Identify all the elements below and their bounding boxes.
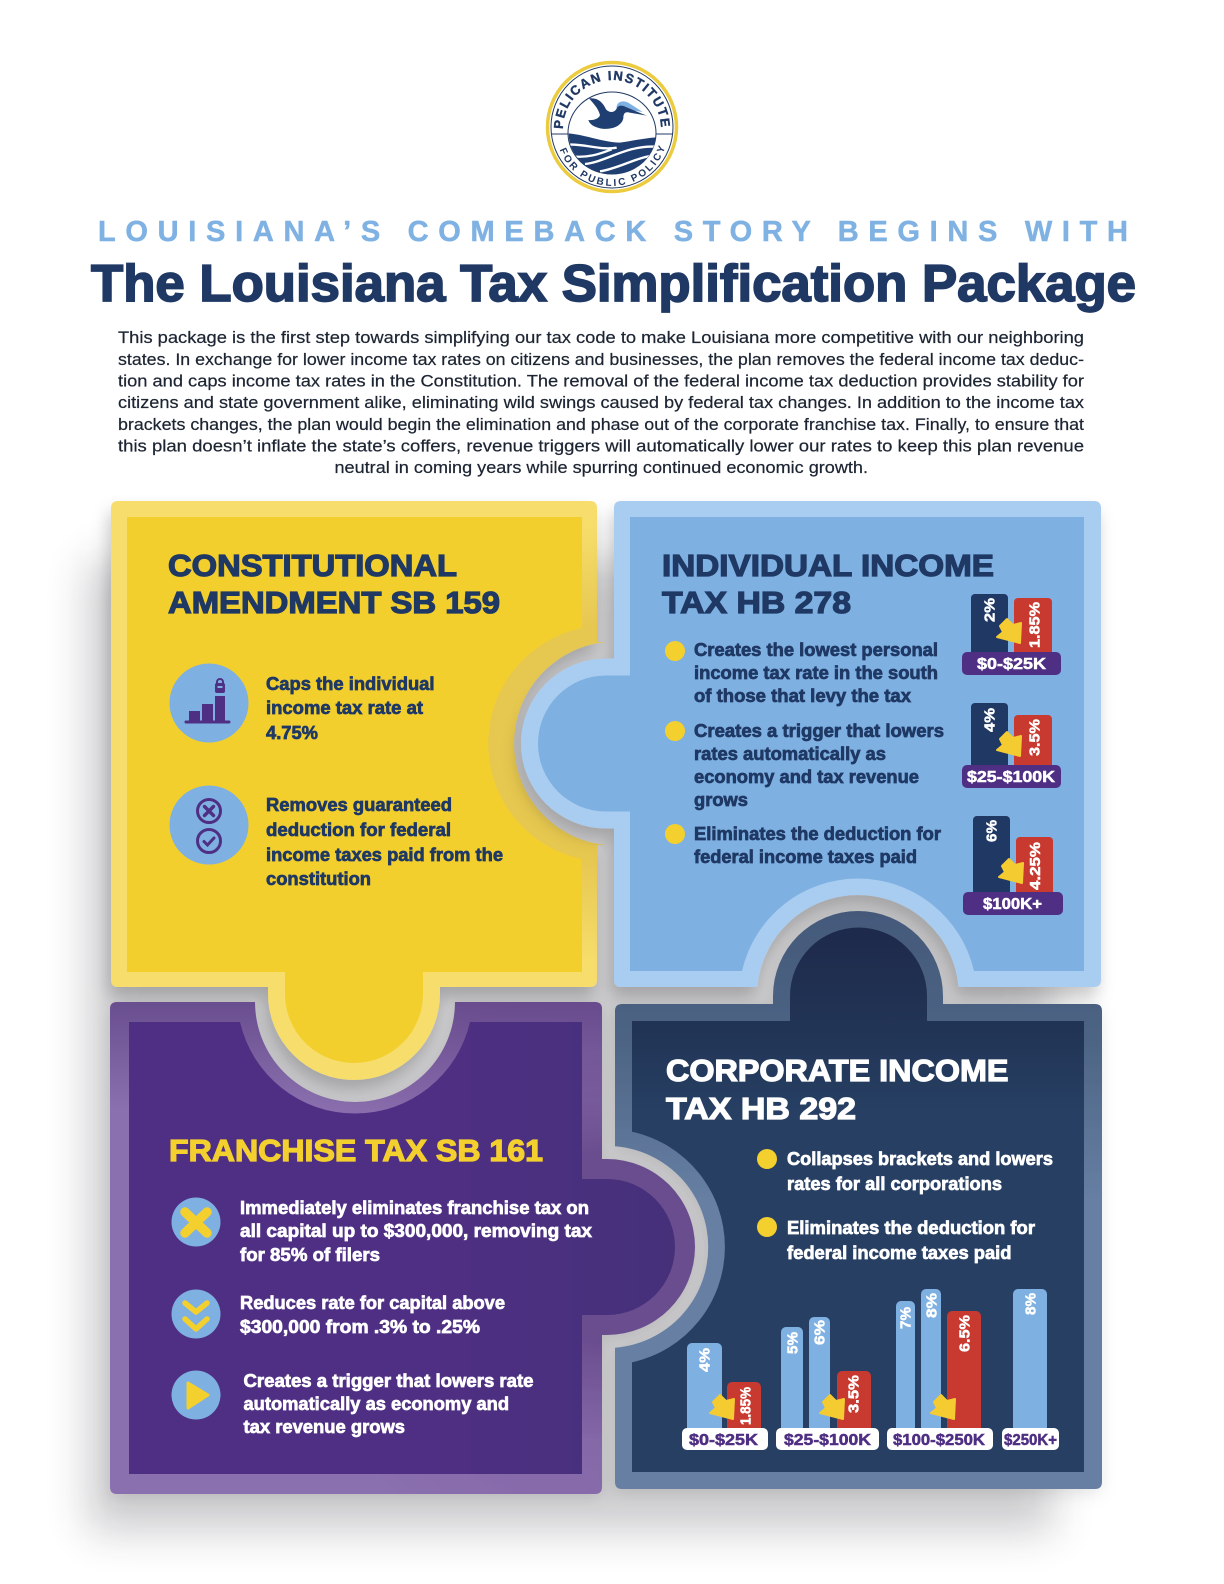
bullet: automatic trigger: Creates a trigger that lowers [694, 721, 944, 741]
heading: individual income tax: TAX HB 278 [662, 585, 851, 620]
text: removes guaranteed deduction [266, 795, 503, 889]
chart: $25-$100K rates [962, 703, 1061, 788]
bullet: lowest personal rate [665, 640, 938, 706]
chart: corporate $25-$100K: 3.5% [846, 1375, 862, 1413]
intro paragraph: tion and caps income tax rates in the Constitution. The removal of the federal income tax deduction provides stability for [118, 372, 1084, 390]
chart: corporate $0-$25K: 1.85% [738, 1387, 754, 1425]
text: immediately eliminates franchise tax: for 85% of filers [240, 1245, 380, 1265]
text: removes guaranteed deduction: constitution [266, 869, 371, 889]
text: reduces rate [240, 1293, 505, 1337]
bullet: eliminates deduction: Eliminates the deduction for [694, 824, 941, 844]
chart: $25-$100K rates: 3.5% [1026, 719, 1044, 756]
chart: corporate $0-$25K [682, 1343, 768, 1450]
chart: $100K+ rates: 6% [984, 820, 1000, 842]
chart: corporate $100-$250K [887, 1289, 993, 1450]
chart: corporate $100-$250K: 7% [898, 1307, 914, 1329]
text: caps income tax rate [266, 674, 434, 743]
bullet: eliminates deduction [665, 824, 941, 867]
bullet: lowest personal rate: Creates the lowest personal [694, 640, 938, 660]
text: caps income tax rate: 4.75% [266, 723, 318, 743]
chart: $25-$100K rates: $25-$100K [967, 769, 1056, 786]
icon: double chevron down [172, 1290, 220, 1338]
puzzle piece borders [110, 501, 1102, 1494]
bullet: automatic trigger: economy and tax revenue [694, 767, 919, 787]
panel: corporate income tax [632, 928, 1084, 1472]
logo: Pelican Institute seal [546, 60, 678, 194]
chart: $0-$25K rates: 2% [982, 598, 998, 622]
chart: $100K+ rates [963, 816, 1063, 915]
intro paragraph: citizens and state government alike, eliminating wild swings caused by federal tax changes. In addition to the income tax [118, 393, 1085, 412]
logo: Pelican Institute seal: PELICAN INSTITUTE [554, 70, 670, 128]
text: caps income tax rate: Caps the individual [266, 674, 434, 694]
chart: corporate $25-$100K: 6% [812, 1320, 828, 1345]
chart: corporate $250K+ [1002, 1289, 1059, 1450]
puzzle soft cast shadow [88, 560, 1054, 1532]
intro paragraph [118, 328, 1085, 477]
chart: corporate $0-$25K: 4% [696, 1348, 714, 1372]
chart: corporate $100-$250K: 6.5% [956, 1315, 974, 1352]
heading: individual income tax [662, 548, 994, 620]
panel: franchise tax [129, 1022, 675, 1474]
title: The Louisiana Tax Simplification Package [91, 255, 1136, 313]
bullet: lowest personal rate: income tax rate in the south [694, 663, 938, 683]
text: creates a trigger [244, 1371, 534, 1437]
chart: corporate $25-$100K: $25-$100K [784, 1432, 872, 1449]
text: creates a trigger: Creates a trigger that lowers rate [244, 1371, 534, 1391]
text: removes guaranteed deduction: income taxes paid from the [266, 845, 503, 865]
bullet: collapses brackets: Collapses brackets and lowers [787, 1149, 1053, 1169]
bullet: eliminates deduction: federal income taxes paid [787, 1243, 1012, 1263]
heading: individual income tax: INDIVIDUAL INCOME [662, 548, 994, 583]
chart: $0-$25K rates: $0-$25K [977, 656, 1047, 673]
panel: constitutional amendment [127, 517, 582, 1063]
text: reduces rate: $300,000 from .3% to .25% [240, 1317, 480, 1337]
bullet: eliminates deduction [757, 1217, 1035, 1263]
heading: corporate income tax: CORPORATE INCOME [666, 1053, 1008, 1088]
text: removes guaranteed deduction: Removes guaranteed [266, 795, 452, 815]
icon: cross and check [170, 786, 248, 864]
chart: $0-$25K rates: 1.85% [1026, 602, 1044, 648]
panel background: yellow [127, 517, 582, 1063]
bullet: automatic trigger: rates automatically as [694, 744, 886, 764]
intro paragraph: states. In exchange for lower income tax rates on citizens and businesses, the plan removes the federal income tax deduc- [118, 350, 1084, 369]
panel background: navy [632, 928, 1084, 1472]
bullet: automatic trigger: grows [694, 790, 748, 810]
chart: $25-$100K rates: 4% [982, 708, 998, 732]
text: immediately eliminates franchise tax [240, 1198, 592, 1265]
heading: constitutional amendment: CONSTITUTIONAL [168, 548, 457, 583]
bullet: automatic trigger [665, 721, 944, 810]
text: removes guaranteed deduction: deduction for federal [266, 820, 451, 840]
bullet: lowest personal rate: of those that levy the tax [694, 686, 911, 706]
heading: franchise tax: FRANCHISE TAX SB 161 [169, 1133, 543, 1168]
heading: constitutional amendment [168, 548, 500, 620]
icon: play triangle [172, 1370, 220, 1420]
heading: constitutional amendment: AMENDMENT SB 159 [168, 585, 500, 620]
icon: capped bar chart [170, 664, 248, 742]
text: creates a trigger: tax revenue grows [244, 1417, 405, 1437]
bullet: collapses brackets: rates for all corporations [787, 1174, 1002, 1194]
text: immediately eliminates franchise tax: all capital up to $300,000, removing tax [240, 1221, 592, 1241]
text: creates a trigger: automatically as economy and [244, 1394, 509, 1414]
text: immediately eliminates franchise tax: Immediately eliminates franchise tax on [240, 1198, 589, 1218]
chart: corporate $100-$250K: 8% [924, 1293, 940, 1318]
chart: corporate $250K+: $250K+ [1004, 1432, 1057, 1449]
text: reduces rate: Reduces rate for capital above [240, 1293, 505, 1313]
bullet: eliminates deduction: federal income taxes paid [694, 847, 917, 867]
intro paragraph: this plan doesn’t inflate the state’s coffers, revenue triggers will automatically lower our rates to keep this plan revenue [118, 436, 1084, 456]
heading: corporate income tax: TAX HB 292 [666, 1091, 856, 1126]
chart: $100K+ rates: $100K+ [983, 896, 1042, 913]
logo: Pelican Institute seal: FOR PUBLIC POLICY [560, 145, 664, 186]
icon: cross [172, 1198, 220, 1246]
bullet: eliminates deduction: Eliminates the deduction for [787, 1218, 1035, 1238]
intro paragraph: brackets changes, the plan would begin the elimination and phase out of the corporate franchise tax. Finally, to ensure that [118, 415, 1084, 434]
intro paragraph: neutral in coming years while spurring continued economic growth. [334, 458, 868, 477]
bullet: collapses brackets [757, 1149, 1053, 1194]
panel background: blue [538, 517, 1084, 971]
chart: $0-$25K rates [962, 594, 1061, 675]
text: caps income tax rate: income tax rate at [266, 698, 423, 718]
chart: corporate $100-$250K: $100-$250K [893, 1432, 986, 1449]
chart: corporate $25-$100K [776, 1317, 879, 1450]
panel: individual income tax [538, 517, 1084, 971]
overline heading: LOUISIANA’S COMEBACK STORY BEGINS WITH [98, 216, 1128, 248]
intro paragraph: This package is the first step towards simplifying our tax code to make Louisiana more competitive with our neighboring [118, 328, 1084, 347]
panel background: purple [129, 1022, 675, 1474]
chart: corporate $250K+: 8% [1022, 1293, 1040, 1315]
chart: corporate $0-$25K: $0-$25K [689, 1432, 759, 1449]
chart: $100K+ rates: 4.25% [1027, 842, 1044, 890]
heading: corporate income tax [666, 1053, 1008, 1126]
chart: corporate $25-$100K: 5% [784, 1332, 802, 1354]
